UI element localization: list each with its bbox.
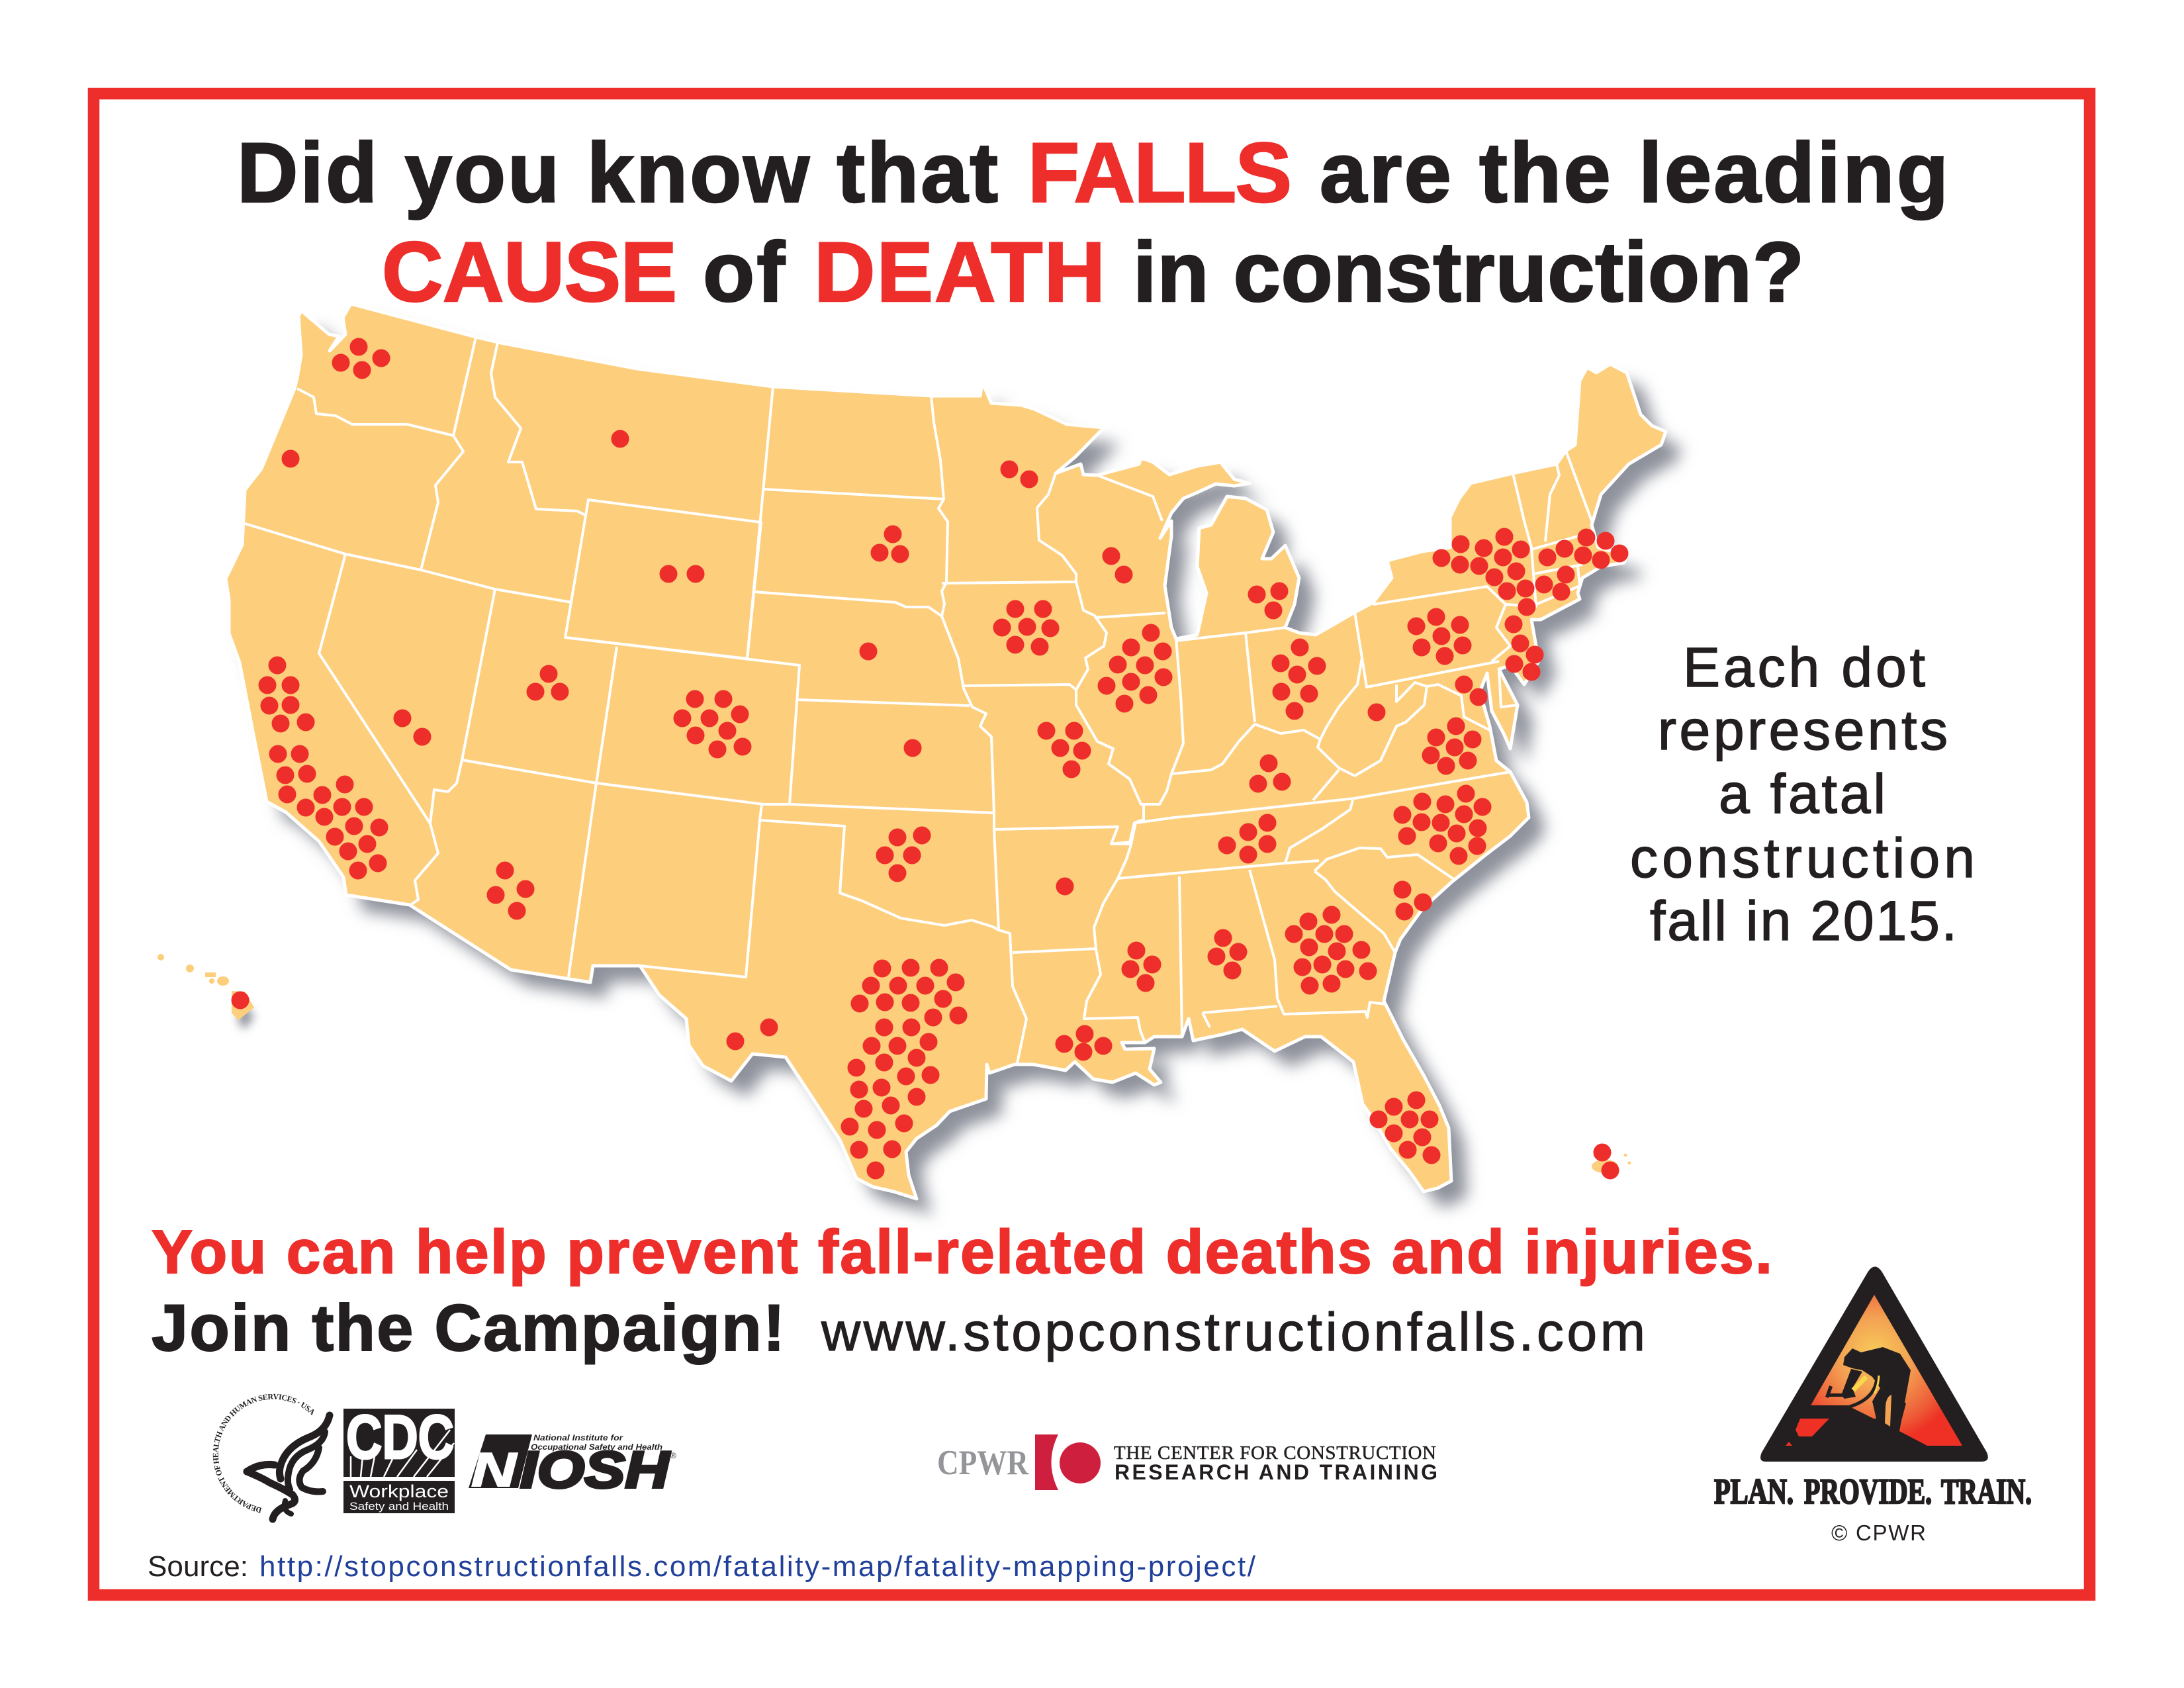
logo: NIOSH: IOSH: [520, 1440, 670, 1499]
logo: CDC: Workplace: [349, 1481, 449, 1501]
source line: http://stopconstructionfalls.com/fatality-map/fatality-mapping-project/: [259, 1550, 1256, 1583]
source line: Source:: [148, 1550, 248, 1583]
logo: NIOSH: ®: [670, 1451, 676, 1460]
logo: CPWR: RESEARCH AND TRAINING: [1115, 1460, 1437, 1484]
logo: CDC: Safety and Health: [349, 1500, 449, 1513]
title: in construction?: [1133, 225, 1804, 320]
slogan: [1714, 1472, 2032, 1511]
land shape: [226, 304, 1666, 1199]
copyright: © CPWR: [1831, 1521, 1926, 1545]
legend note: each dot: Each dot: [1683, 636, 1925, 698]
legend note: each dot: fall in 2015.: [1650, 890, 1957, 952]
slogan: PLAN.: [1714, 1472, 1794, 1511]
campaign line: Join the Campaign!: [152, 1291, 785, 1364]
logo: NIOSH: Occupational Safety and Health: [531, 1442, 662, 1452]
logo: CDC: [343, 1402, 455, 1513]
legend note: each dot: [1630, 636, 1975, 952]
title: CAUSE: [382, 225, 677, 320]
logo: CPWR: CPWR: [937, 1444, 1029, 1482]
logo: CDC: CDC: [346, 1402, 454, 1472]
logo: NIOSH: National Institute for: [533, 1433, 624, 1442]
logo: HHS: DEPARTMENT OF HEALTH AND HUMAN SERVICES · USA: [213, 1394, 314, 1513]
logo: CPWR: THE CENTER FOR CONSTRUCTION: [1114, 1442, 1436, 1464]
hawaii: [158, 954, 254, 1029]
title: DEATH: [814, 225, 1105, 320]
logo: worker triangle: [1760, 1267, 1988, 1462]
slogan: PROVIDE.: [1804, 1472, 1932, 1511]
map of the United States: [158, 304, 1682, 1215]
state borders: [245, 337, 1592, 1063]
call to action: You can help prevent fall-related deaths and injuries.: [152, 1217, 1772, 1286]
slogan: TRAIN.: [1941, 1472, 2032, 1511]
website: www.stopconstructionfalls.com: [821, 1302, 1645, 1362]
title: are the leading: [1320, 126, 1948, 220]
legend note: each dot: construction: [1630, 827, 1975, 889]
title: [237, 126, 1948, 320]
title: FALLS: [1028, 126, 1292, 220]
legend note: each dot: a fatal: [1719, 763, 1886, 825]
logo: NIOSH: N: [471, 1444, 518, 1497]
puerto rico: [1592, 1153, 1631, 1173]
logo: NIOSH: [469, 1433, 676, 1499]
logo: CPWR: [937, 1434, 1437, 1490]
fatality dots: [232, 338, 1628, 1179]
title: of: [703, 225, 785, 320]
legend note: each dot: represents: [1658, 699, 1948, 761]
title: Did you know that: [237, 126, 998, 220]
